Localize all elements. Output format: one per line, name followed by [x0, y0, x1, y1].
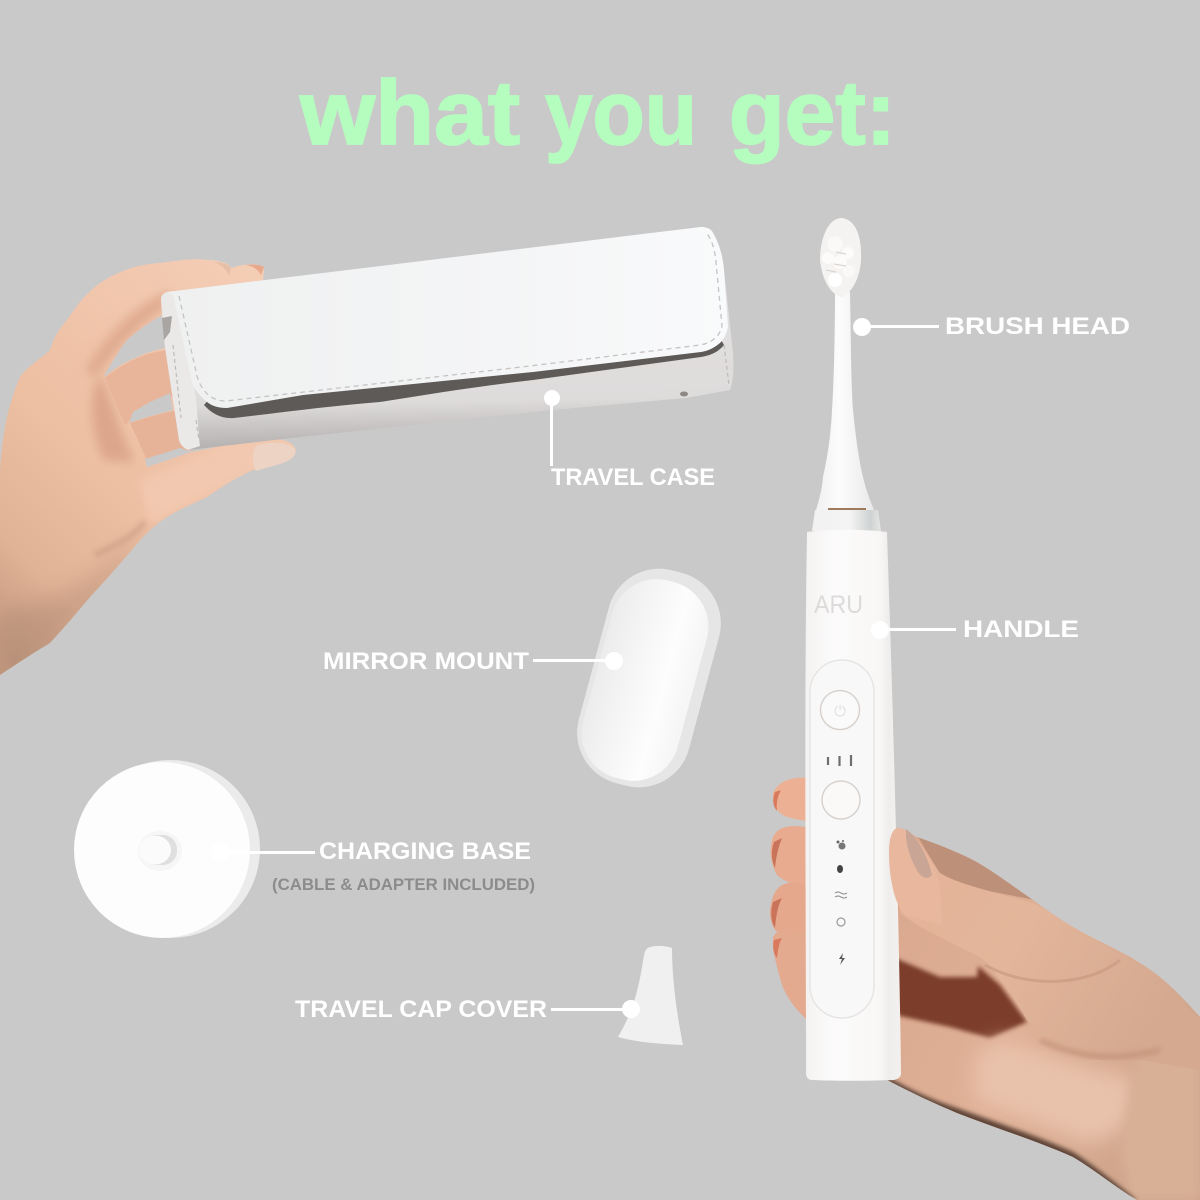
right hand palm	[860, 820, 1200, 1200]
power button	[820, 690, 860, 730]
flap shadow	[204, 338, 724, 418]
label: mirror mount: MIRROR MOUNT	[323, 648, 529, 675]
wrist shading	[1124, 1061, 1197, 1197]
mode button	[822, 781, 860, 819]
title: get:	[729, 63, 896, 164]
label: brush head	[853, 313, 1130, 340]
label: travel case	[544, 390, 715, 491]
label: handle: HANDLE	[963, 616, 1079, 643]
logo: ARU	[814, 591, 863, 619]
label: charging base: (CABLE & ADAPTER INCLUDED)	[272, 876, 535, 894]
left hand holding case	[0, 259, 296, 680]
mirror mount	[565, 557, 733, 799]
thumb nail	[906, 829, 932, 878]
gaps between fingers	[103, 315, 166, 378]
gold ring	[828, 508, 866, 510]
collar	[812, 510, 881, 531]
side stitching	[173, 345, 729, 440]
brush neck	[816, 292, 874, 510]
back of hand behind thumb	[917, 835, 1035, 900]
mode icons	[835, 840, 847, 965]
title	[299, 63, 896, 164]
title: what	[299, 63, 520, 164]
thumb nail	[253, 443, 295, 471]
label: charging base: CHARGING BASE	[319, 838, 531, 865]
label: brush head: BRUSH HEAD	[945, 313, 1130, 340]
light patch on palm	[975, 1040, 1135, 1145]
label: travel cap cover: TRAVEL CAP COVER	[295, 996, 547, 1023]
case left side panel	[161, 292, 200, 450]
case snap	[680, 392, 688, 396]
shadow across palm	[895, 958, 1027, 1038]
toothbrush	[805, 218, 901, 1081]
label: travel case: TRAVEL CASE	[551, 464, 715, 491]
right thumb in front	[889, 828, 1164, 1060]
power glyph: ⏻	[834, 703, 846, 720]
control panel	[810, 660, 874, 1018]
lower edge shadow	[887, 1076, 1137, 1200]
travel case	[161, 227, 733, 450]
brush head	[820, 218, 861, 298]
right hand fingers behind handle	[770, 778, 812, 1025]
label: charging base	[211, 838, 535, 894]
travel cap cover	[618, 946, 683, 1045]
handle body	[805, 530, 901, 1081]
case flap	[167, 227, 728, 408]
flap stitching	[179, 232, 722, 401]
intensity marks	[828, 755, 851, 766]
title: you	[545, 63, 697, 164]
case lower body	[161, 227, 733, 450]
label: mirror mount	[323, 648, 623, 675]
charging base	[74, 760, 260, 938]
label: handle	[871, 616, 1079, 643]
